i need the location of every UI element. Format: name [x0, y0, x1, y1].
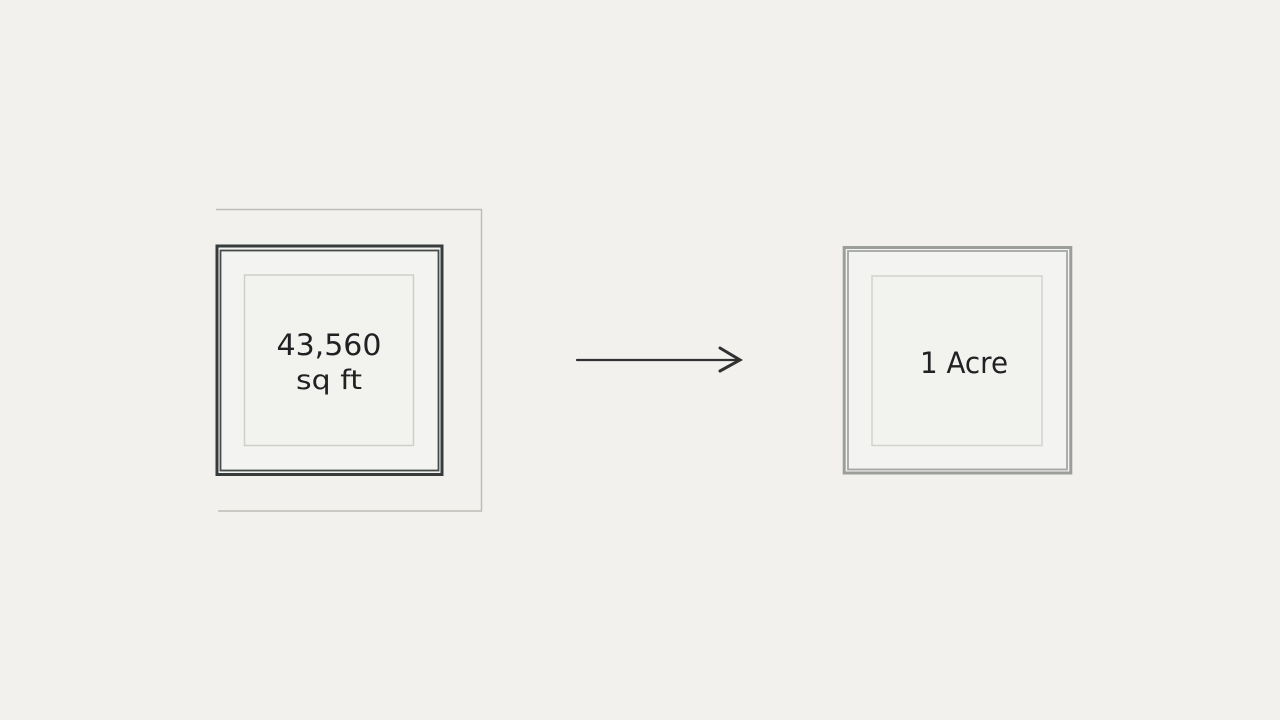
inner light square	[872, 276, 1042, 446]
outer thin open frame	[216, 210, 482, 511]
double dark border	[217, 246, 442, 474]
label: 43,560 sq ft: 43,560	[276, 328, 382, 362]
label: 43,560 sq ft: sq ft	[296, 365, 362, 396]
panel: 43,560 sq ft square	[216, 210, 482, 511]
double grey border	[844, 248, 1071, 473]
arrow	[577, 348, 740, 371]
label: 43,560 sq ft	[276, 328, 382, 396]
label: 1 Acre: 1 Acre	[920, 346, 1008, 380]
panel: 1 Acre square	[844, 248, 1071, 473]
inner light square	[244, 275, 414, 446]
